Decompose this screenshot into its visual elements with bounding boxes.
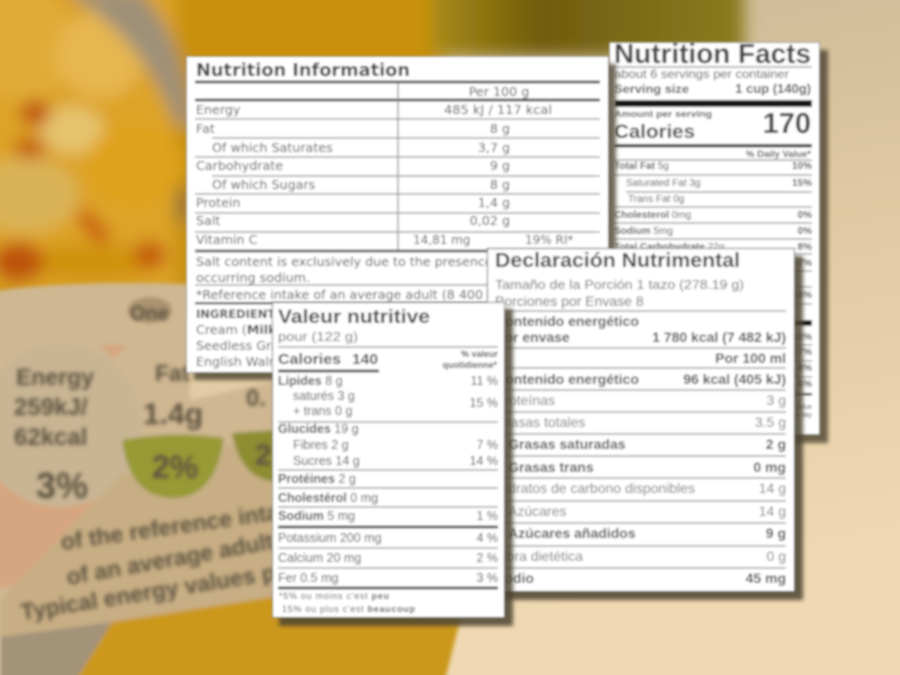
panel: Nutrition Facts label: Includes 9g Added Sugars: [640, 290, 757, 301]
panel: Nutrition Information label: Salt: [196, 213, 220, 228]
panel: Declaración Nutrimental label: Grasas saturadas: [508, 436, 626, 452]
panel: Valeur nutritive label: quotidienne*: [442, 360, 497, 370]
panel: Nutrition Facts label: 27%: [792, 347, 812, 358]
panel: Declaración Nutrimental label: Azúcares añadidos: [508, 525, 636, 541]
panel: Nutrition Information label: [186, 56, 616, 380]
panel: Declaración Nutrimental label: Azúcares: [508, 503, 566, 519]
pack label text: 62kcal: [14, 424, 87, 451]
panel: Valeur nutritive label: Sucres 14 g: [293, 454, 360, 468]
panel: Valeur nutritive label: [272, 302, 513, 626]
panel: Declaración Nutrimental label: 96 kcal (405 kJ): [683, 371, 786, 387]
panel: Nutrition Facts label: 8%: [798, 363, 812, 374]
panel: Declaración Nutrimental label: Sodio: [495, 570, 534, 586]
panel: Nutrition Facts label: 1 cup (140g): [735, 81, 811, 96]
panel: Nutrition Facts label: Calories: [614, 122, 695, 143]
panel: Valeur nutritive label: 3 %: [476, 571, 498, 585]
pack label text: 0.: [246, 385, 266, 412]
panel: Nutrition Information label: Vitamin C: [196, 232, 258, 247]
panel: Valeur nutritive label: 4 %: [476, 531, 498, 545]
panel: Nutrition Facts label: Potassium 240mg: [614, 379, 694, 390]
panel: Declaración Nutrimental label: 45 mg: [746, 570, 786, 586]
panel: Nutrition Facts label: Sodium 5mg: [614, 226, 673, 237]
panel: Valeur nutritive label: saturés 3 g: [293, 389, 355, 403]
panel: Valeur nutritive label: Cholestérol 0 mg: [278, 491, 378, 505]
panel: Nutrition Information label: 9 g: [490, 158, 510, 173]
panel: Nutrition Facts label: calories a day: [769, 412, 812, 419]
panel: Declaración Nutrimental label: 3.5 g: [755, 414, 786, 430]
pack label text: 259kJ/: [14, 394, 88, 421]
panel: Nutrition Facts label: about 6 servings per container: [614, 67, 789, 81]
pack label text: of an average adult: [64, 528, 276, 590]
panel: Nutrition Information label: 8 g: [490, 121, 510, 136]
panel: Valeur nutritive label: Potassium 200 mg: [278, 531, 382, 545]
pack label text: Typical energy values p: [19, 559, 277, 625]
panel: Declaración Nutrimental label: Grasas trans: [508, 459, 594, 475]
panel: Nutrition Facts label: Total Fat 5g: [614, 161, 669, 172]
panel: Valeur nutritive label: 11 %: [470, 374, 498, 388]
pack label text: 3%: [36, 465, 88, 506]
panel: Nutrition Facts label: 15%: [792, 178, 812, 189]
panel: Nutrition Facts label: Saturated Fat 3g: [626, 178, 700, 189]
panel: Nutrition Facts label: [610, 38, 828, 443]
panel: Nutrition Information label: INGREDIENTS: [196, 307, 284, 321]
pack label text: 2%: [152, 449, 198, 485]
panel: Valeur nutritive label: + trans 0 g: [293, 404, 352, 418]
panel: Nutrition Facts label: Iron 1.4mg: [614, 363, 662, 374]
pack label text: Energy: [16, 364, 94, 390]
pack label text: [14, 303, 306, 625]
panel: Nutrition Facts label: 10%: [792, 332, 812, 343]
panel: Declaración Nutrimental label: Contenido energético: [495, 313, 639, 329]
panel: Valeur nutritive label: *5% ou moins c'est peu: [279, 591, 389, 601]
panel: Nutrition Information label: 3,7 g: [478, 140, 510, 155]
panel: Declaración Nutrimental label: [488, 248, 803, 600]
panel: Nutrition Facts label: 170: [763, 108, 811, 140]
panel: Declaración Nutrimental label: Tamaño de la Porción 1 tazo (278.19 g): [495, 277, 744, 292]
panel: Declaración Nutrimental label: 0 g: [767, 548, 786, 564]
panel: Valeur nutritive label: 1 %: [476, 509, 498, 523]
panel: Valeur nutritive label: % valeur: [461, 349, 498, 359]
panel: Nutrition Facts label: 6%: [798, 379, 812, 390]
heading: Nutrition Information: Nutrition Information: [196, 60, 410, 81]
panel: Nutrition Facts label: Calcium 260mg: [614, 347, 683, 358]
heading: Valeur nutritive: Valeur nutritive: [278, 307, 430, 328]
panel: Nutrition Information label: 485 kJ / 117 kcal: [444, 102, 552, 117]
panel: Nutrition Facts label: 7%: [798, 258, 812, 269]
panel: Valeur nutritive label: Fer 0.5 mg: [278, 571, 338, 585]
panel: Valeur nutritive label: Calories: [278, 351, 341, 368]
heading: Nutrition Facts: Nutrition Facts: [614, 38, 811, 69]
pack label text: 2: [255, 439, 272, 472]
panel: Valeur nutritive label: 7 %: [476, 438, 498, 452]
panel: Nutrition Facts label: 0%: [798, 210, 812, 221]
panel: Declaración Nutrimental label: 14 g: [759, 480, 786, 496]
panel: Nutrition Facts label: the Daily Value: [765, 404, 812, 411]
pack label text: Fat: [155, 360, 190, 386]
panel: Nutrition Facts label: Amount per serving: [614, 109, 712, 119]
heading: Declaración Nutrimental: Declaración Nutrimental: [495, 250, 740, 272]
panel: Declaración Nutrimental label: Fibra dietética: [495, 548, 583, 564]
panel: Nutrition Facts label: 18%: [792, 290, 812, 301]
panel: Declaración Nutrimental label: 3 g: [767, 392, 786, 408]
panel: Declaración Nutrimental label: Contenido energético: [495, 371, 639, 387]
panel: Nutrition Information label: Energy: [196, 102, 241, 117]
panel: Valeur nutritive label: Calcium 20 mg: [278, 551, 361, 565]
panel: Nutrition Information label: *Reference intake of an average adult (8 400 kJ/2 000 kcal): [196, 287, 573, 302]
panel: Nutrition Facts label: Total Sugars 14g: [626, 274, 701, 285]
panel: Nutrition Information label: Of which Sugars: [212, 177, 315, 192]
panel: Valeur nutritive label: 15 %: [470, 396, 498, 410]
panel: Nutrition Information label: 1,4 g: [478, 195, 510, 210]
panel: Valeur nutritive label: Protéines 2 g: [278, 472, 356, 486]
pack label background: [0, 283, 460, 675]
panel: Nutrition Information label: 14,81 mg: [413, 233, 470, 247]
panel: Valeur nutritive label: Sodium 5 mg: [278, 509, 355, 523]
panel: Nutrition Information label: Cream (Milk): [196, 322, 281, 337]
panel: Declaración Nutrimental label: 2 g: [766, 436, 786, 452]
panel: Nutrition Facts label: Trans Fat 0g: [628, 194, 684, 205]
panel: Nutrition Information label: Protein: [196, 195, 240, 210]
panel: Nutrition Facts label: Total Carbohydrate 22g: [614, 242, 724, 253]
panel: Declaración Nutrimental label: Hidratos de carbono disponibles: [495, 480, 695, 496]
panel: Nutrition Information label: 19% RI*: [525, 233, 573, 247]
panel: Nutrition Facts label: Cholesterol 0mg: [614, 210, 691, 221]
panel: Declaración Nutrimental label: Por envase: [495, 329, 570, 345]
panel: Nutrition Information label: Seedless Grapes: [196, 338, 302, 353]
pack label text: of the reference intake: [59, 495, 306, 555]
panel: Nutrition Facts label: Vitamin D 2mcg: [614, 332, 684, 343]
panel: Valeur nutritive label: 2 %: [476, 551, 498, 565]
panel: Valeur nutritive label: Glucides 19 g: [278, 422, 359, 436]
panel: Declaración Nutrimental label: Proteínas: [495, 392, 555, 408]
panel: Nutrition Facts label: Serving size: [614, 82, 689, 96]
panel: Nutrition Information label: English Walnuts: [196, 354, 297, 369]
panel: Declaración Nutrimental label: Por 100 ml: [715, 350, 786, 366]
panel: Declaración Nutrimental label: Porciones por Envase 8: [495, 293, 644, 309]
panel: Nutrition Facts label: 8%: [798, 242, 812, 253]
panel: Valeur nutritive label: 15% ou plus c'est beaucoup: [282, 604, 416, 614]
pack label text: 1.4g: [143, 398, 203, 431]
panel: Nutrition Information label: occurring sodium.: [196, 270, 310, 285]
panel: Declaración Nutrimental label: 14 g: [759, 503, 786, 519]
panel: Nutrition Facts label: 0%: [798, 226, 812, 237]
panel: Declaración Nutrimental label: Grasas totales: [495, 414, 585, 430]
panel: Declaración Nutrimental label: 9 g: [766, 525, 786, 541]
panel: Valeur nutritive label: pour (122 g): [278, 329, 358, 344]
panel: Nutrition Information label: Of which Saturates: [212, 140, 333, 155]
panel: Valeur nutritive label: Lipides 8 g: [278, 374, 343, 388]
pack label text: One: [130, 303, 169, 325]
panel: Nutrition Information label: Salt content is exclusively due to the presence of naturally: [196, 254, 570, 269]
panel: Nutrition Information label: Carbohydrate: [196, 158, 283, 173]
panel: Nutrition Facts label: Dietary Fiber 2g: [626, 258, 697, 269]
panel: Valeur nutritive label: 140: [352, 351, 378, 368]
panel: Nutrition Information label: Per 100 g: [469, 84, 529, 99]
panel: Valeur nutritive label: 14 %: [470, 454, 498, 468]
panel: Nutrition Facts label: % Daily Value*: [746, 149, 811, 160]
panel: Declaración Nutrimental label: 0 mg: [753, 459, 786, 475]
panel: Nutrition Information label: 8 g: [490, 177, 510, 192]
panel: Nutrition Facts label: 10%: [792, 161, 812, 172]
panel: Nutrition Information label: Fat: [196, 121, 215, 136]
panel: Nutrition Facts label: Protein 2g: [614, 307, 662, 318]
panel: Nutrition Information label: 0,02 g: [470, 213, 510, 228]
panel: Valeur nutritive label: Fibres 2 g: [293, 438, 349, 452]
panel: Declaración Nutrimental label: 1 780 kcal (7 482 kJ): [652, 329, 786, 345]
